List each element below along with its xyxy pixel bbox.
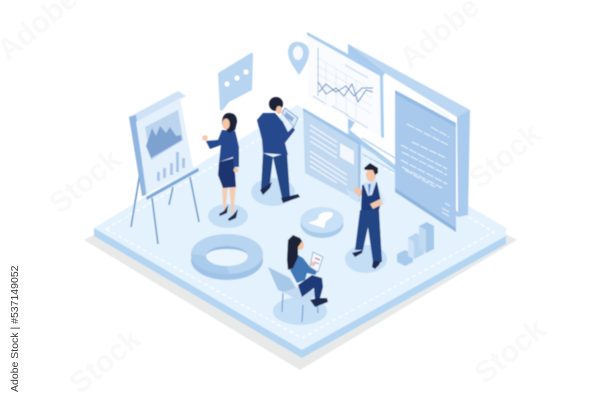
chart grid: [318, 58, 372, 118]
tablet: [310, 252, 323, 272]
face: [276, 106, 282, 114]
platform top: [94, 105, 506, 350]
watermark text: Stock: [43, 142, 127, 220]
platform side: [94, 228, 506, 358]
shoes: [310, 298, 328, 307]
vertical stock credit: Adobe Stock | #537149052: [9, 265, 21, 392]
icon: user disc: [300, 207, 344, 238]
chart axis: [317, 48, 319, 96]
face: [222, 118, 230, 130]
shoes: [352, 250, 381, 269]
hand: [311, 262, 315, 266]
speech bubble: [218, 53, 253, 111]
bar blocks icon: [397, 222, 434, 266]
face: [366, 168, 376, 182]
ledge: [146, 168, 199, 200]
board: [129, 93, 193, 195]
woman on chair: [268, 235, 328, 325]
legs: [355, 210, 382, 262]
document panel: center: [303, 108, 361, 202]
donut chart: [191, 234, 263, 280]
floor disc: [273, 297, 327, 325]
floor disc: [345, 245, 387, 273]
man with glasses: [345, 163, 387, 273]
hand on waist: [370, 199, 383, 209]
legs: [298, 275, 323, 300]
icon: location pin: [288, 42, 309, 75]
easel legs: [131, 173, 199, 244]
chair legs: [282, 293, 318, 322]
shoes: [260, 182, 300, 203]
flip chart easel: [129, 91, 199, 244]
line chart card: [307, 32, 384, 138]
skirt: [218, 158, 236, 188]
floor disc: [208, 204, 248, 228]
card text lines: [313, 65, 368, 128]
hand: [354, 187, 363, 196]
jacket: [206, 130, 239, 167]
platform dashed border: [106, 117, 494, 338]
text lines: [310, 125, 347, 185]
chart lines: [318, 82, 373, 102]
legs: [222, 186, 236, 213]
legs: [261, 153, 290, 198]
chair back: [268, 267, 302, 298]
watermark text: Stock: [468, 312, 552, 390]
back screen panel: [348, 44, 470, 217]
white image square: [340, 143, 354, 165]
sleeve: [370, 183, 385, 210]
man with tablet: [251, 97, 300, 206]
woman presenter: [202, 113, 248, 228]
tablet: [282, 108, 298, 127]
main artwork: [84, 32, 517, 370]
text lines: [401, 124, 450, 216]
vest: [361, 182, 381, 210]
hair: [364, 163, 378, 175]
hair: [269, 97, 283, 111]
chair seat: [283, 287, 322, 303]
area chart: [145, 110, 183, 160]
watermark text: Stock: [63, 322, 147, 400]
platform shadow: [84, 124, 517, 370]
collar and tie: [363, 180, 377, 196]
hands: [202, 135, 208, 141]
lower screen supports and stripes: [349, 128, 395, 172]
tablet: [346, 188, 360, 203]
bar chart: [157, 152, 185, 181]
watermark text: Stock: [463, 117, 547, 195]
hair: [287, 235, 302, 270]
jacket: [257, 113, 295, 155]
floor disc: [251, 178, 295, 206]
face: [296, 240, 304, 250]
torso: [290, 255, 317, 283]
hair: [222, 113, 237, 133]
document panel: right: [395, 90, 456, 232]
shoes: [219, 205, 238, 221]
